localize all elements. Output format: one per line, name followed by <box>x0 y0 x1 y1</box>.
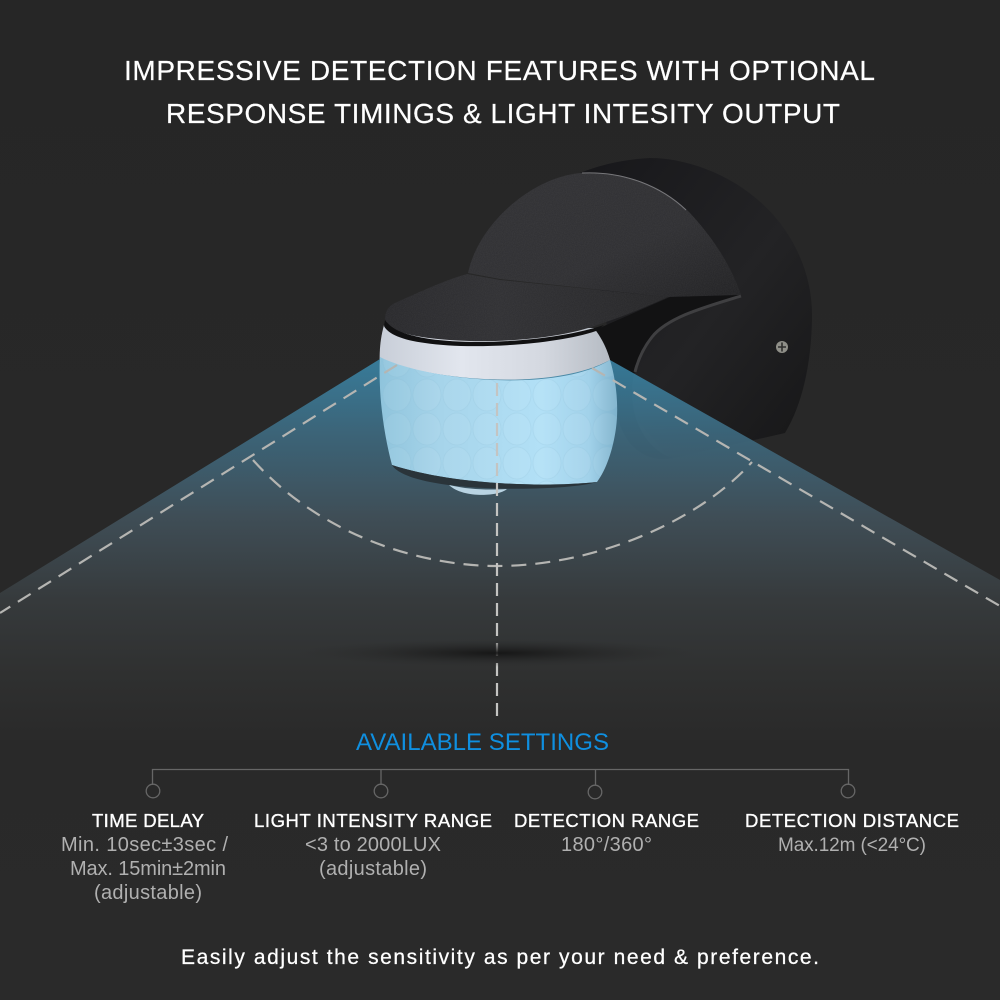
setting: detection range <box>514 810 699 856</box>
motion sensor device <box>380 158 812 459</box>
setting: light intensity range: <3 to 2000LUX <box>305 834 441 856</box>
lens white band <box>380 325 613 392</box>
setting: time delay: Max. 15min±2min <box>70 858 226 880</box>
setting: detection distance <box>745 810 959 856</box>
cap rim <box>384 320 604 346</box>
centre dashed line <box>496 383 498 720</box>
setting: light intensity range: (adjustable) <box>319 858 427 880</box>
setting: time delay: Min. 10sec±3sec / <box>61 834 228 856</box>
hood highlight <box>582 173 686 210</box>
title <box>124 55 875 129</box>
setting: time delay: (adjustable) <box>94 882 202 904</box>
sensor cap <box>385 274 668 341</box>
neck joint <box>595 295 741 459</box>
setting: time delay: TIME DELAY <box>92 810 204 831</box>
lens blue body <box>380 357 617 485</box>
setting: detection range: 180°/360° <box>561 834 652 856</box>
setting: light intensity range <box>254 810 492 880</box>
cap texture <box>385 274 668 341</box>
setting: light intensity range: LIGHT INTENSITY RANGE <box>254 810 492 831</box>
title: RESPONSE TIMINGS & LIGHT INTESITY OUTPUT <box>166 98 840 129</box>
lens bottom bulb <box>449 485 507 495</box>
available settings heading: AVAILABLE SETTINGS <box>356 729 609 756</box>
screw <box>776 341 788 353</box>
dome hood <box>468 173 741 297</box>
detection beam <box>0 359 1000 740</box>
lens facets <box>380 357 617 485</box>
device shadow <box>297 639 697 667</box>
lens underside <box>392 465 597 489</box>
dome texture <box>468 173 741 297</box>
neck highlight <box>635 296 741 372</box>
dashed detection lines <box>0 365 1000 613</box>
footer note: Easily adjust the sensitivity as per your need & preference. <box>181 946 819 969</box>
setting: time delay <box>61 810 228 904</box>
title: IMPRESSIVE DETECTION FEATURES WITH OPTIONAL <box>124 55 875 86</box>
settings connector <box>146 770 855 799</box>
sensor lens front <box>380 274 668 495</box>
setting: detection range: DETECTION RANGE <box>514 810 699 831</box>
setting: detection distance: Max.12m (<24°C) <box>778 835 926 856</box>
wall mount disc <box>580 158 812 459</box>
setting: detection distance: DETECTION DISTANCE <box>745 810 959 831</box>
